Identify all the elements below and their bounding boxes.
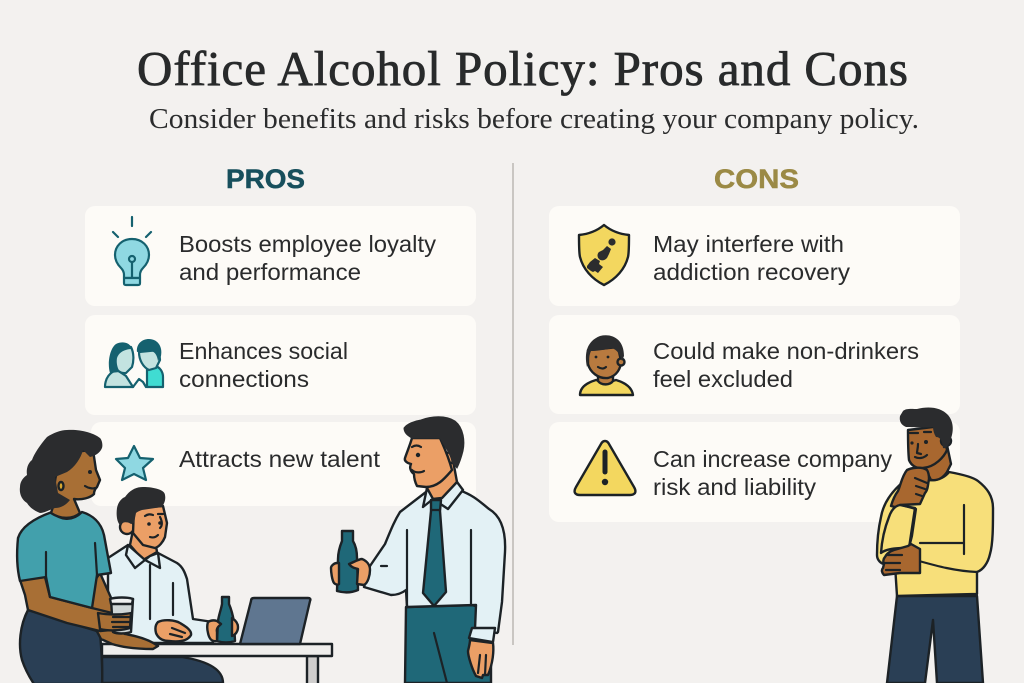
panel: cons card 3: risk and liability [653, 474, 817, 500]
text: enhances: Enhances social [179, 338, 348, 364]
illustration: table [102, 644, 332, 683]
panel: cons card 1: addiction recovery [653, 259, 851, 285]
panel: pros card 2: connections [179, 366, 309, 392]
text: can increase: Can increase company [653, 446, 893, 472]
divider [512, 163, 514, 645]
icon: shield with bottle [579, 225, 629, 285]
panel: pros card 1: and performance [179, 259, 361, 285]
panel: cons card 3 [549, 422, 960, 522]
illustration: table bottle [207, 597, 238, 642]
icon: star [116, 446, 153, 480]
illustration: laptop [240, 598, 310, 644]
illustration: thinking man [877, 407, 993, 683]
illustration: standing man [331, 417, 505, 683]
text: may interfere: May interfere with [653, 231, 844, 257]
panel: cons card 2 [549, 315, 960, 414]
illustration: woman [17, 430, 158, 683]
panel: pros card 3 [91, 422, 476, 506]
panel: pros card 1 [85, 206, 476, 306]
icon: light bulb [113, 217, 151, 285]
icon: two people [105, 339, 163, 387]
icon: warning triangle [575, 441, 635, 495]
text: could make: Could make non-drinkers [653, 338, 919, 364]
panel: cons card 2: feel excluded [653, 366, 793, 392]
title: Office Alcohol Policy: Pros and Cons [137, 41, 908, 96]
heading: cons: CONS [714, 164, 799, 194]
text: boosts: Boosts employee loyalty [179, 231, 437, 257]
text: attracts: Attracts new talent [179, 446, 381, 472]
subtitle: Consider benefits and risks before creating your company policy. [149, 103, 919, 135]
illustration: seated man [102, 487, 223, 683]
icon: person [580, 335, 633, 395]
panel: pros card 2 [85, 315, 476, 415]
heading: pros: PROS [226, 164, 305, 194]
panel: cons card 1 [549, 206, 960, 306]
